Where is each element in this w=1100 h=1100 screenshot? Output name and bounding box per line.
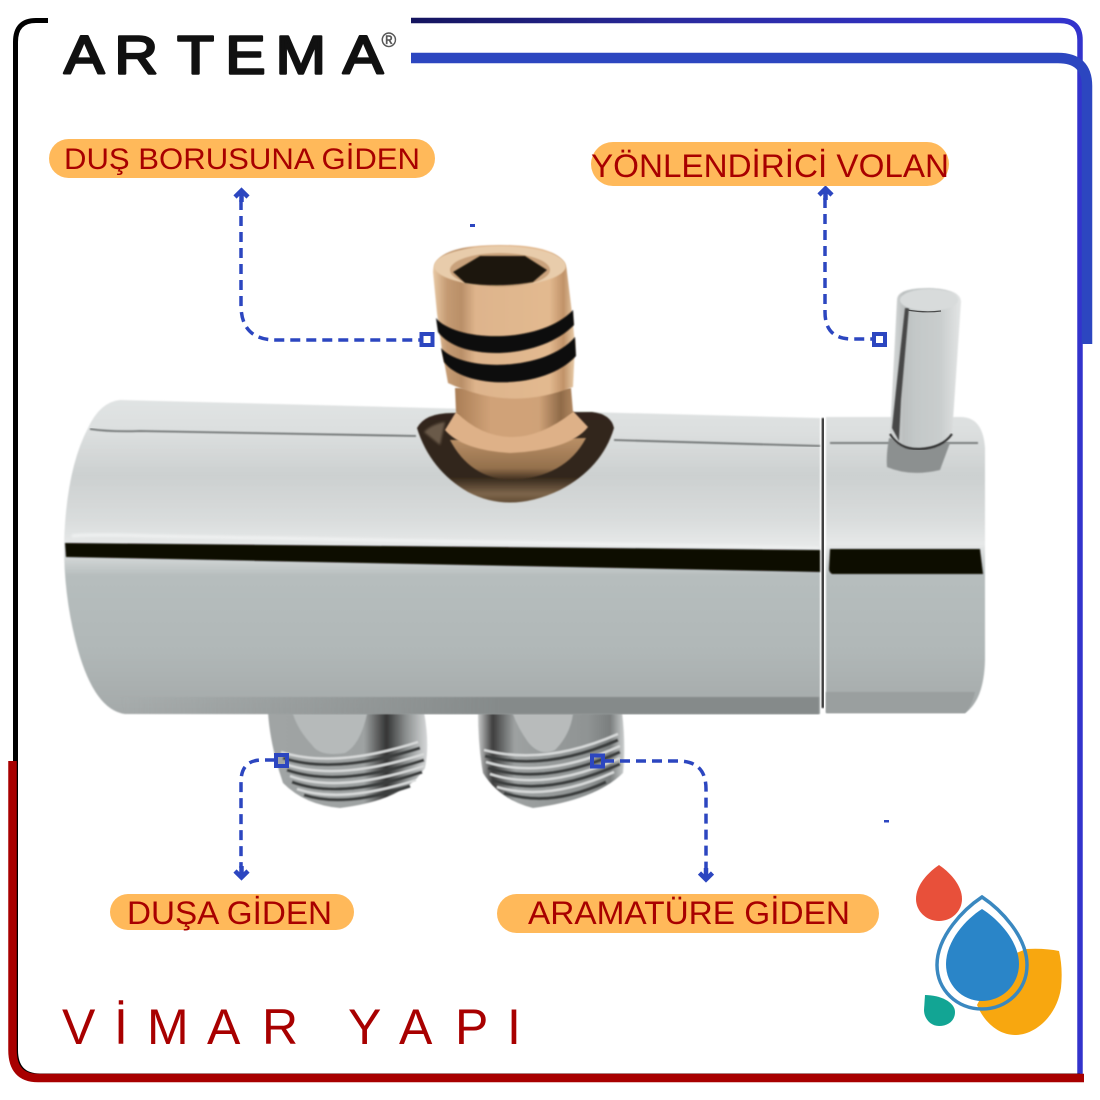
stray dot lower	[884, 820, 889, 822]
lever shadow	[887, 438, 950, 473]
teal drop	[924, 995, 955, 1026]
lever base ring	[890, 434, 952, 449]
main chrome body	[64, 400, 820, 714]
lever handle	[890, 288, 961, 448]
brass neck	[455, 388, 573, 437]
connector: faucet outlet	[592, 756, 712, 880]
collar gap	[822, 418, 824, 708]
label: to faucet: ARAMATÜRE GİDEN	[528, 895, 850, 931]
red drop	[916, 865, 962, 921]
orange drop	[977, 949, 1062, 1035]
anchor square	[276, 755, 287, 766]
connector: shower pipe	[235, 190, 432, 345]
connector: lever	[819, 188, 885, 345]
registered mark: ®	[382, 30, 396, 52]
frame: red border	[12, 761, 1084, 1078]
stray dot upper	[470, 224, 475, 227]
threaded outlet right	[478, 712, 624, 808]
o-ring bottom	[441, 337, 576, 382]
dark reflection band right	[829, 549, 983, 574]
stud top face	[434, 246, 566, 286]
label: shower pipe: DUŞ BORUSUNA GİDEN	[64, 143, 420, 176]
collar lower shade	[826, 692, 975, 713]
lever top	[900, 289, 958, 311]
dark reflection band	[65, 543, 820, 572]
brass ball	[450, 438, 586, 480]
frame: blue thick border	[411, 58, 1087, 344]
logo: ARTEMA: ARTEMA	[64, 25, 384, 86]
arrowhead down	[235, 866, 248, 878]
product illustration	[64, 245, 985, 808]
top groove lines	[90, 429, 978, 446]
lower body shade	[120, 697, 819, 714]
lever dark reflection	[892, 308, 909, 441]
label: diverter lever: YÖNLENDİRİCİ VOLAN	[591, 148, 949, 184]
o-ring top	[436, 310, 574, 353]
anchor square	[422, 334, 432, 345]
brass stud	[433, 245, 575, 399]
highlight above band	[72, 535, 820, 548]
collar right highlight	[978, 440, 982, 640]
anchor square	[592, 756, 603, 766]
anchor square	[874, 334, 885, 345]
brand text: VİMAR YAPI: YAPI	[348, 999, 521, 1055]
brand text: VİMAR YAPI: VİMAR	[62, 999, 298, 1055]
arrowhead up	[235, 190, 248, 202]
threaded outlet left	[268, 712, 427, 808]
lever top edge line	[907, 310, 941, 312]
icon: water drops logo	[916, 865, 1062, 1035]
stud inner recess	[450, 253, 550, 287]
label: to shower: DUŞA GİDEN	[127, 895, 332, 931]
frame: blue thin border	[411, 20, 1080, 1076]
arrowhead down	[700, 868, 712, 880]
connector: shower outlet	[235, 755, 287, 878]
blue drop	[946, 909, 1019, 1001]
hole in body	[417, 412, 614, 503]
hole left reflection	[424, 422, 445, 445]
brass flange	[445, 411, 588, 453]
right chrome collar	[826, 417, 985, 713]
hex socket	[453, 256, 547, 285]
arrowhead up	[819, 188, 832, 200]
blue drop outline	[937, 897, 1027, 1009]
